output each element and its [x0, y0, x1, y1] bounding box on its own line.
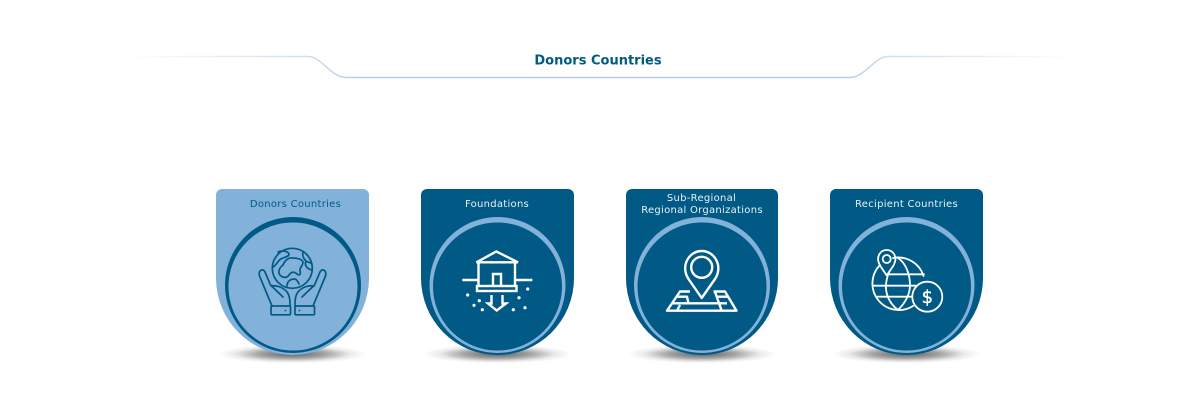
ring	[634, 217, 770, 353]
ring	[839, 217, 975, 353]
card shadow	[424, 344, 572, 364]
panel: Sub-Regional Regional Organizations: Regional Organizations	[641, 205, 763, 216]
card shadow	[832, 344, 980, 364]
card shape	[830, 189, 983, 355]
label: Donors Countries	[250, 199, 341, 210]
card shape	[626, 189, 778, 355]
dollar sign: $	[922, 287, 933, 308]
header bracket line	[125, 56, 1075, 78]
panel: Donors Countries	[216, 189, 369, 364]
card shape	[216, 189, 369, 355]
icon: map with location pin	[667, 251, 736, 311]
ring	[430, 217, 566, 353]
icon: house on foundation	[462, 252, 532, 311]
label: Sub-Regional	[667, 193, 736, 204]
card shadow	[218, 344, 366, 364]
card shape	[421, 189, 574, 355]
panel: Sub-Regional Regional Organizations	[626, 189, 778, 364]
ring	[225, 217, 361, 353]
label: Foundations	[465, 199, 529, 210]
label: Recipient Countries	[855, 199, 958, 210]
card shadow	[628, 344, 776, 364]
icon: hands holding globe	[259, 248, 326, 315]
title: Donors Countries	[534, 54, 662, 68]
icon: globe with pin and dollar	[872, 250, 942, 312]
panel: Recipient Countries	[830, 189, 983, 364]
panel: Foundations	[421, 189, 574, 364]
